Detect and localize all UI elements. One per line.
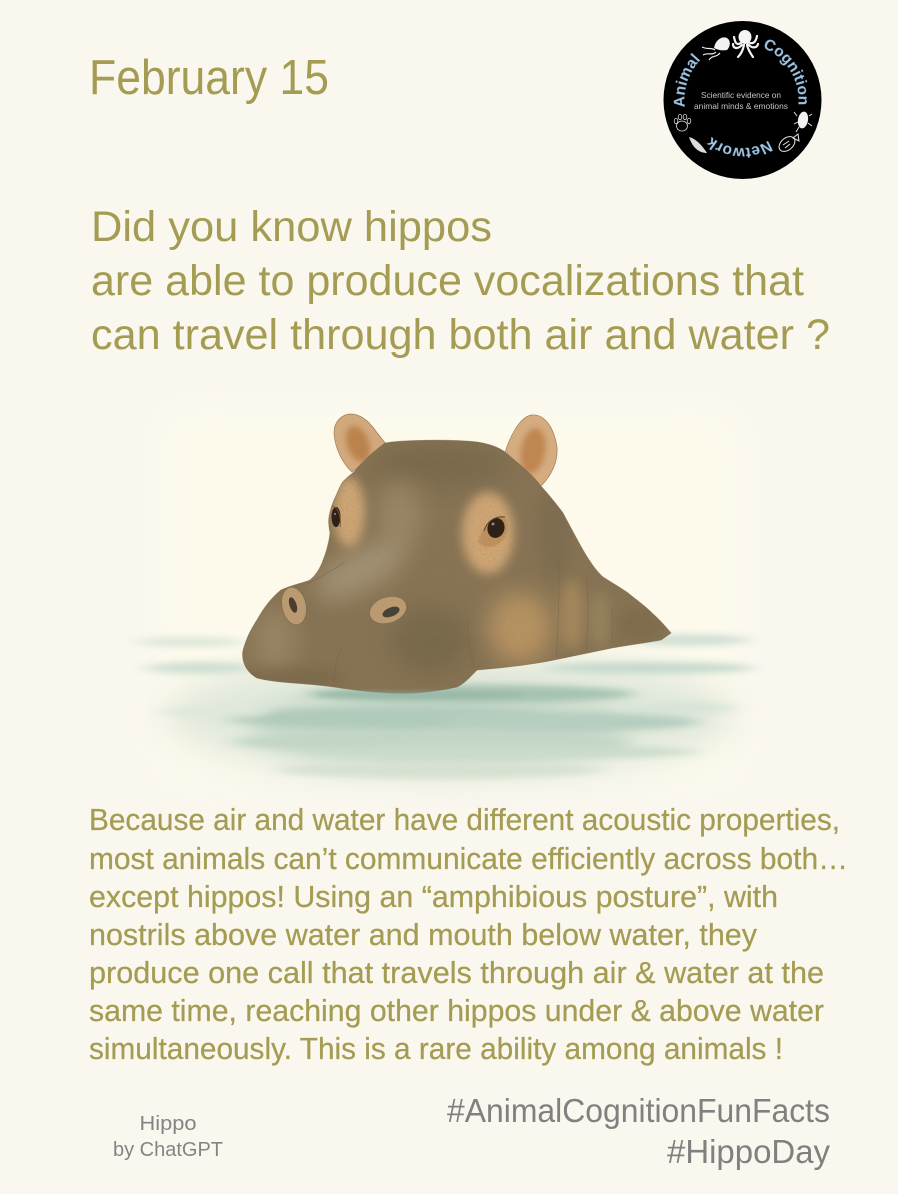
illustration: hippo in water — [135, 410, 755, 780]
main question heading: can travel through both air and water ? — [91, 311, 830, 359]
body paragraph: simultaneously. This is a rare ability among animals ! — [89, 1032, 783, 1066]
logo tagline: animal minds & emotions — [694, 101, 788, 111]
hashtags: #HippoDay — [667, 1133, 830, 1170]
logo word: Cognition: Cognition — [764, 39, 808, 105]
logo tagline — [694, 90, 788, 111]
logo word: Network: Network — [706, 136, 773, 158]
body paragraph — [89, 803, 848, 1066]
main question heading: are able to produce vocalizations that — [91, 257, 804, 305]
logo tagline: Scientific evidence on — [701, 90, 781, 100]
date heading: February 15 — [89, 51, 329, 105]
water reflection under hippo — [315, 691, 525, 699]
hippo head and shading — [242, 440, 672, 694]
image credit: Hippo — [140, 1113, 196, 1135]
image credit: by ChatGPT — [113, 1139, 223, 1161]
body paragraph: produce one call that travels through air & water at the — [89, 956, 824, 990]
hashtags — [447, 1092, 830, 1170]
hashtags: #AnimalCognitionFunFacts — [447, 1092, 830, 1129]
left ear — [334, 414, 386, 472]
image credit — [113, 1113, 223, 1161]
body paragraph: same time, reaching other hippos under & above water — [89, 994, 824, 1028]
icon: paw print — [674, 114, 691, 131]
right eye — [478, 516, 508, 547]
main question heading — [91, 203, 830, 359]
icon: jellyfish — [702, 37, 730, 60]
logo word: Animal: Animal — [674, 52, 700, 108]
icon: feather — [689, 137, 707, 153]
icon: octopus — [733, 30, 758, 57]
right ear — [505, 415, 557, 486]
right nostril — [366, 592, 410, 628]
water washes — [135, 634, 755, 778]
body paragraph: nostrils above water and mouth below water, they — [89, 918, 758, 952]
body paragraph: Because air and water have different acoustic properties, — [89, 803, 840, 837]
paper halo — [160, 410, 740, 780]
left nostril — [278, 585, 310, 627]
icon: fish — [776, 134, 799, 154]
left eye — [332, 506, 341, 527]
icon: beetle — [794, 111, 812, 132]
body paragraph: except hippos! Using an “amphibious posture”, with — [89, 880, 778, 914]
skin folds and mouth lines — [305, 555, 613, 686]
body paragraph: most animals can’t communicate efficiently across both… — [89, 842, 848, 876]
logo: Animal Cognition Network — [664, 21, 822, 179]
main question heading: Did you know hippos — [91, 203, 492, 251]
